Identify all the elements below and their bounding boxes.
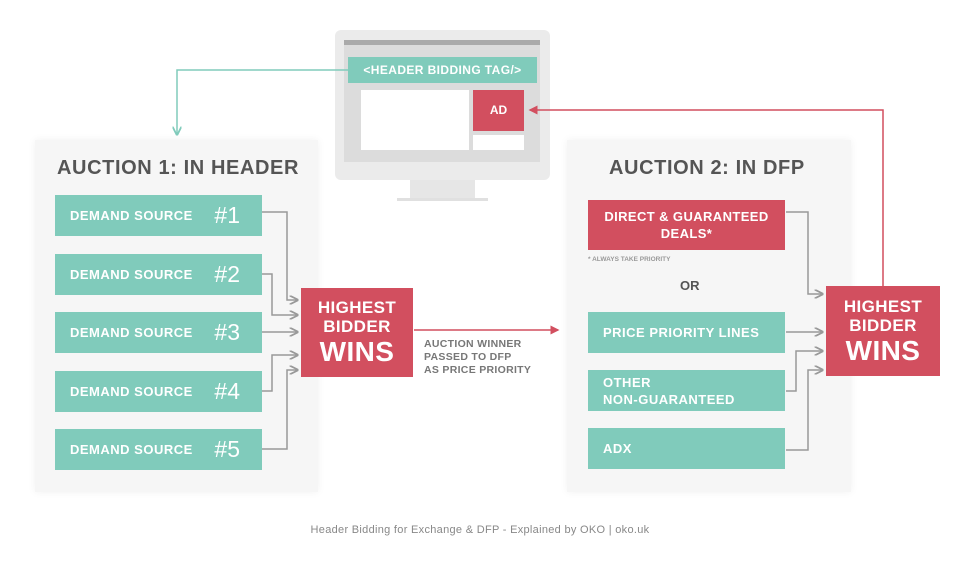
auction winner text: PASSED TO DFP [424,351,512,363]
direct deals [588,200,785,250]
auction winner text: AUCTION WINNER [424,338,522,350]
demand source 1: #1 [214,202,240,228]
demand source 2 [55,254,262,295]
demand source 4: #4 [214,378,240,404]
other non-guaranteed: OTHER [603,374,651,390]
demand source 1 [55,195,262,236]
auction winner text [424,338,531,376]
demand source 3: DEMAND SOURCE [70,325,193,340]
note: * ALWAYS TAKE PRIORITY [588,256,670,263]
highest bidder wins right: WINS [846,335,920,366]
price priority lines: PRICE PRIORITY LINES [603,325,759,340]
other non-guaranteed [588,370,785,411]
demand source 5: DEMAND SOURCE [70,442,193,457]
header bidding tag: <HEADER BIDDING TAG/> [363,63,522,77]
highest bidder wins right: BIDDER [849,316,917,335]
highest bidder wins right [826,286,940,376]
demand source 3 [55,312,262,353]
OR: OR [680,278,700,293]
demand source 5 [55,429,262,470]
highest bidder wins left: HIGHEST [318,298,396,317]
panel: auction 2 [567,140,851,492]
auction winner text: AS PRICE PRIORITY [424,364,531,376]
price priority lines [588,312,785,353]
demand source 1: DEMAND SOURCE [70,208,193,223]
footer: Header Bidding for Exchange & DFP - Explained by OKO | oko.uk [311,524,649,536]
heading: auction 1: AUCTION 1: IN HEADER [57,157,299,179]
highest bidder wins right: HIGHEST [844,297,922,316]
demand source 4 [55,371,262,412]
adx: ADX [603,441,632,456]
other non-guaranteed: NON-GUARANTEED [603,392,735,406]
monitor [335,30,550,201]
demand source 4: DEMAND SOURCE [70,384,193,399]
adx [588,428,785,469]
highest bidder wins left: WINS [320,336,394,367]
demand source 3: #3 [214,319,240,345]
demand sources [55,195,262,470]
highest bidder wins left [301,288,413,377]
demand source 2: #2 [214,261,240,287]
direct deals: DEALS* [661,226,712,241]
ad slot: AD [490,103,507,117]
demand source 2: DEMAND SOURCE [70,267,193,282]
highest bidder wins left: BIDDER [323,317,391,336]
header bidding tag [348,57,537,83]
heading: auction 2: AUCTION 2: IN DFP [609,157,805,179]
ad slot [473,90,524,131]
panel: auction 1 [35,140,318,492]
direct deals: DIRECT & GUARANTEED [604,209,769,224]
demand source 5: #5 [214,436,240,462]
